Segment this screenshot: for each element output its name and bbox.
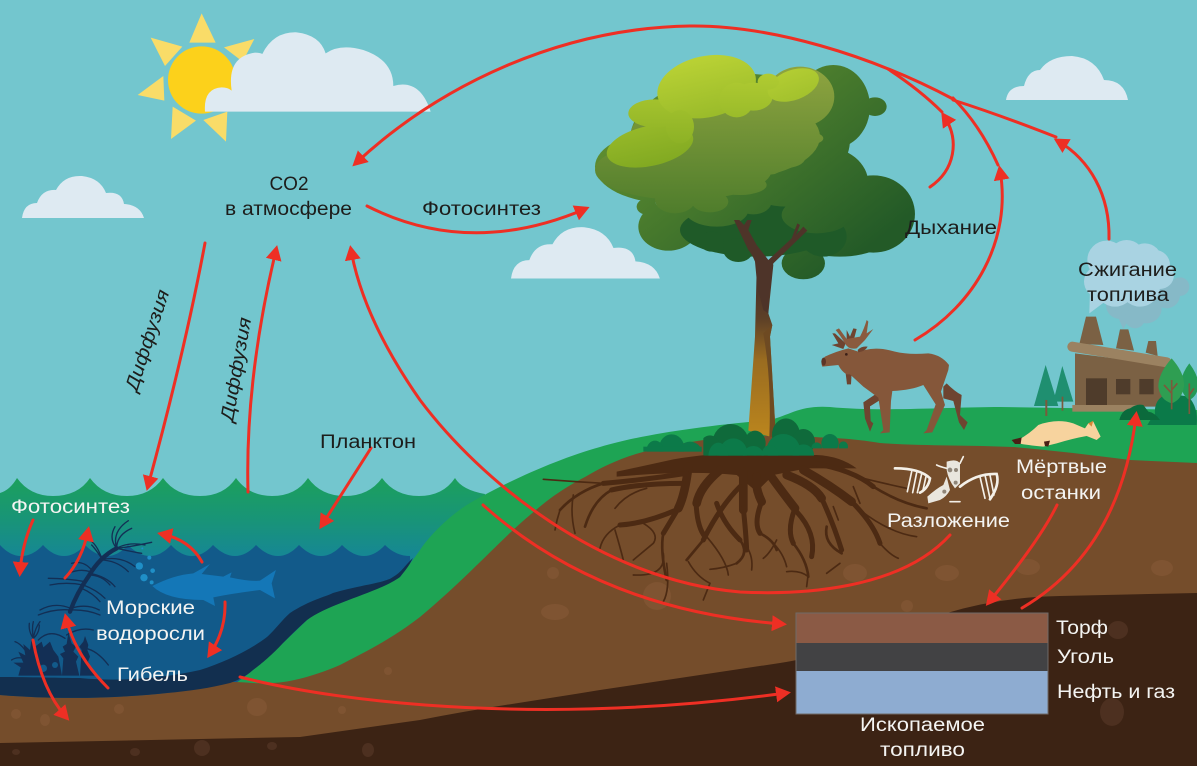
label: fossil fuel	[860, 715, 985, 761]
arrow: respiration tree	[930, 116, 953, 187]
arrow: plankton	[322, 448, 371, 525]
label: respiration: Дыхание	[905, 218, 997, 239]
label: CO2 in atmosphere: CO2	[269, 174, 309, 195]
label: dead remains: останки	[1021, 483, 1101, 504]
icon: sun	[138, 13, 254, 142]
arrow: photosynthesis to tree	[367, 206, 585, 233]
sea floor	[0, 558, 413, 698]
label: oil and gas: Нефть и газ	[1057, 682, 1175, 703]
label: diffusion left: Диффузия	[121, 287, 174, 396]
label: seaweed	[96, 598, 205, 645]
label: death: Гибель	[117, 665, 188, 686]
label: fossil fuel: топливо	[880, 740, 965, 761]
tree crown	[595, 46, 915, 279]
icon: conifers	[1034, 365, 1073, 416]
cloud: centre	[511, 227, 660, 278]
smoke cloud	[1084, 240, 1189, 329]
tree trunk and branches	[734, 220, 807, 438]
arrow: branch to fuel burning	[953, 100, 1056, 137]
arrow: diffusion up	[248, 250, 276, 492]
arrow: branch to tree respiration	[888, 69, 942, 112]
ground: brown soil and green surface	[0, 407, 1197, 766]
arrow: fish respiration	[162, 534, 202, 562]
arrow: fish death	[210, 602, 225, 654]
seaweed	[12, 521, 152, 676]
fossil fuel layers	[796, 613, 1048, 714]
cloud: top right	[1006, 56, 1128, 100]
arrow: moose respiration	[915, 170, 1002, 340]
arrow: branch to moose respiration	[953, 98, 998, 165]
label: fuel burning: Сжигание	[1078, 260, 1177, 281]
ocean	[0, 478, 485, 700]
label: peat: Торф	[1056, 618, 1108, 639]
label: sea photosynthesis: Фотосинтез	[11, 497, 130, 518]
icon: skeleton bones	[895, 457, 997, 503]
arrow: diffusion down	[148, 243, 205, 486]
label: fuel burning: топлива	[1087, 285, 1169, 306]
label: dead remains: Мёртвые	[1016, 457, 1107, 478]
label: fossil fuel: Ископаемое	[860, 715, 985, 736]
label: plankton: Планктон	[320, 432, 416, 453]
arrow: soil to peat	[483, 505, 782, 624]
arrow: ocean floor to oil	[240, 677, 786, 709]
arrow: death to seaweed	[66, 618, 108, 688]
label: decomposition: Разложение	[887, 511, 1010, 532]
bushes at tree base	[643, 418, 848, 456]
arrow: seaweed to sediment	[33, 640, 66, 717]
label: fuel burning	[1078, 260, 1177, 306]
arrow: fuel to burning	[1022, 416, 1136, 608]
label: CO2 in atmosphere	[225, 174, 352, 220]
icon: factory	[1072, 317, 1167, 412]
arrow: decomposition to atmosphere	[351, 250, 950, 593]
arrow: sea photosynthesis down	[20, 520, 33, 572]
arrow: atmosphere return arc	[356, 26, 953, 163]
label: seaweed: Морские	[106, 598, 195, 619]
cloud: over sun	[205, 32, 431, 112]
arrow: seaweed up	[65, 531, 88, 578]
tree roots	[543, 455, 927, 602]
icon: moose	[821, 320, 968, 433]
label: CO2 in atmosphere: в атмосфере	[225, 199, 352, 220]
icon: fish	[152, 564, 276, 606]
label: seaweed: водоросли	[96, 624, 205, 645]
cloud: left	[22, 176, 144, 218]
bubbles	[136, 547, 155, 584]
icon: trees and bushes by factory	[1119, 358, 1198, 425]
arrow: fuel burning	[1058, 141, 1109, 239]
icon: dead animal	[1012, 421, 1101, 447]
arrow: remains to peat	[989, 505, 1057, 602]
soil pebbles	[11, 559, 1173, 757]
label: photosynthesis: Фотосинтез	[422, 199, 541, 220]
label: diffusion right: Диффузия	[217, 316, 256, 425]
label: dead remains	[1016, 457, 1107, 504]
label: coal: Уголь	[1057, 647, 1114, 668]
